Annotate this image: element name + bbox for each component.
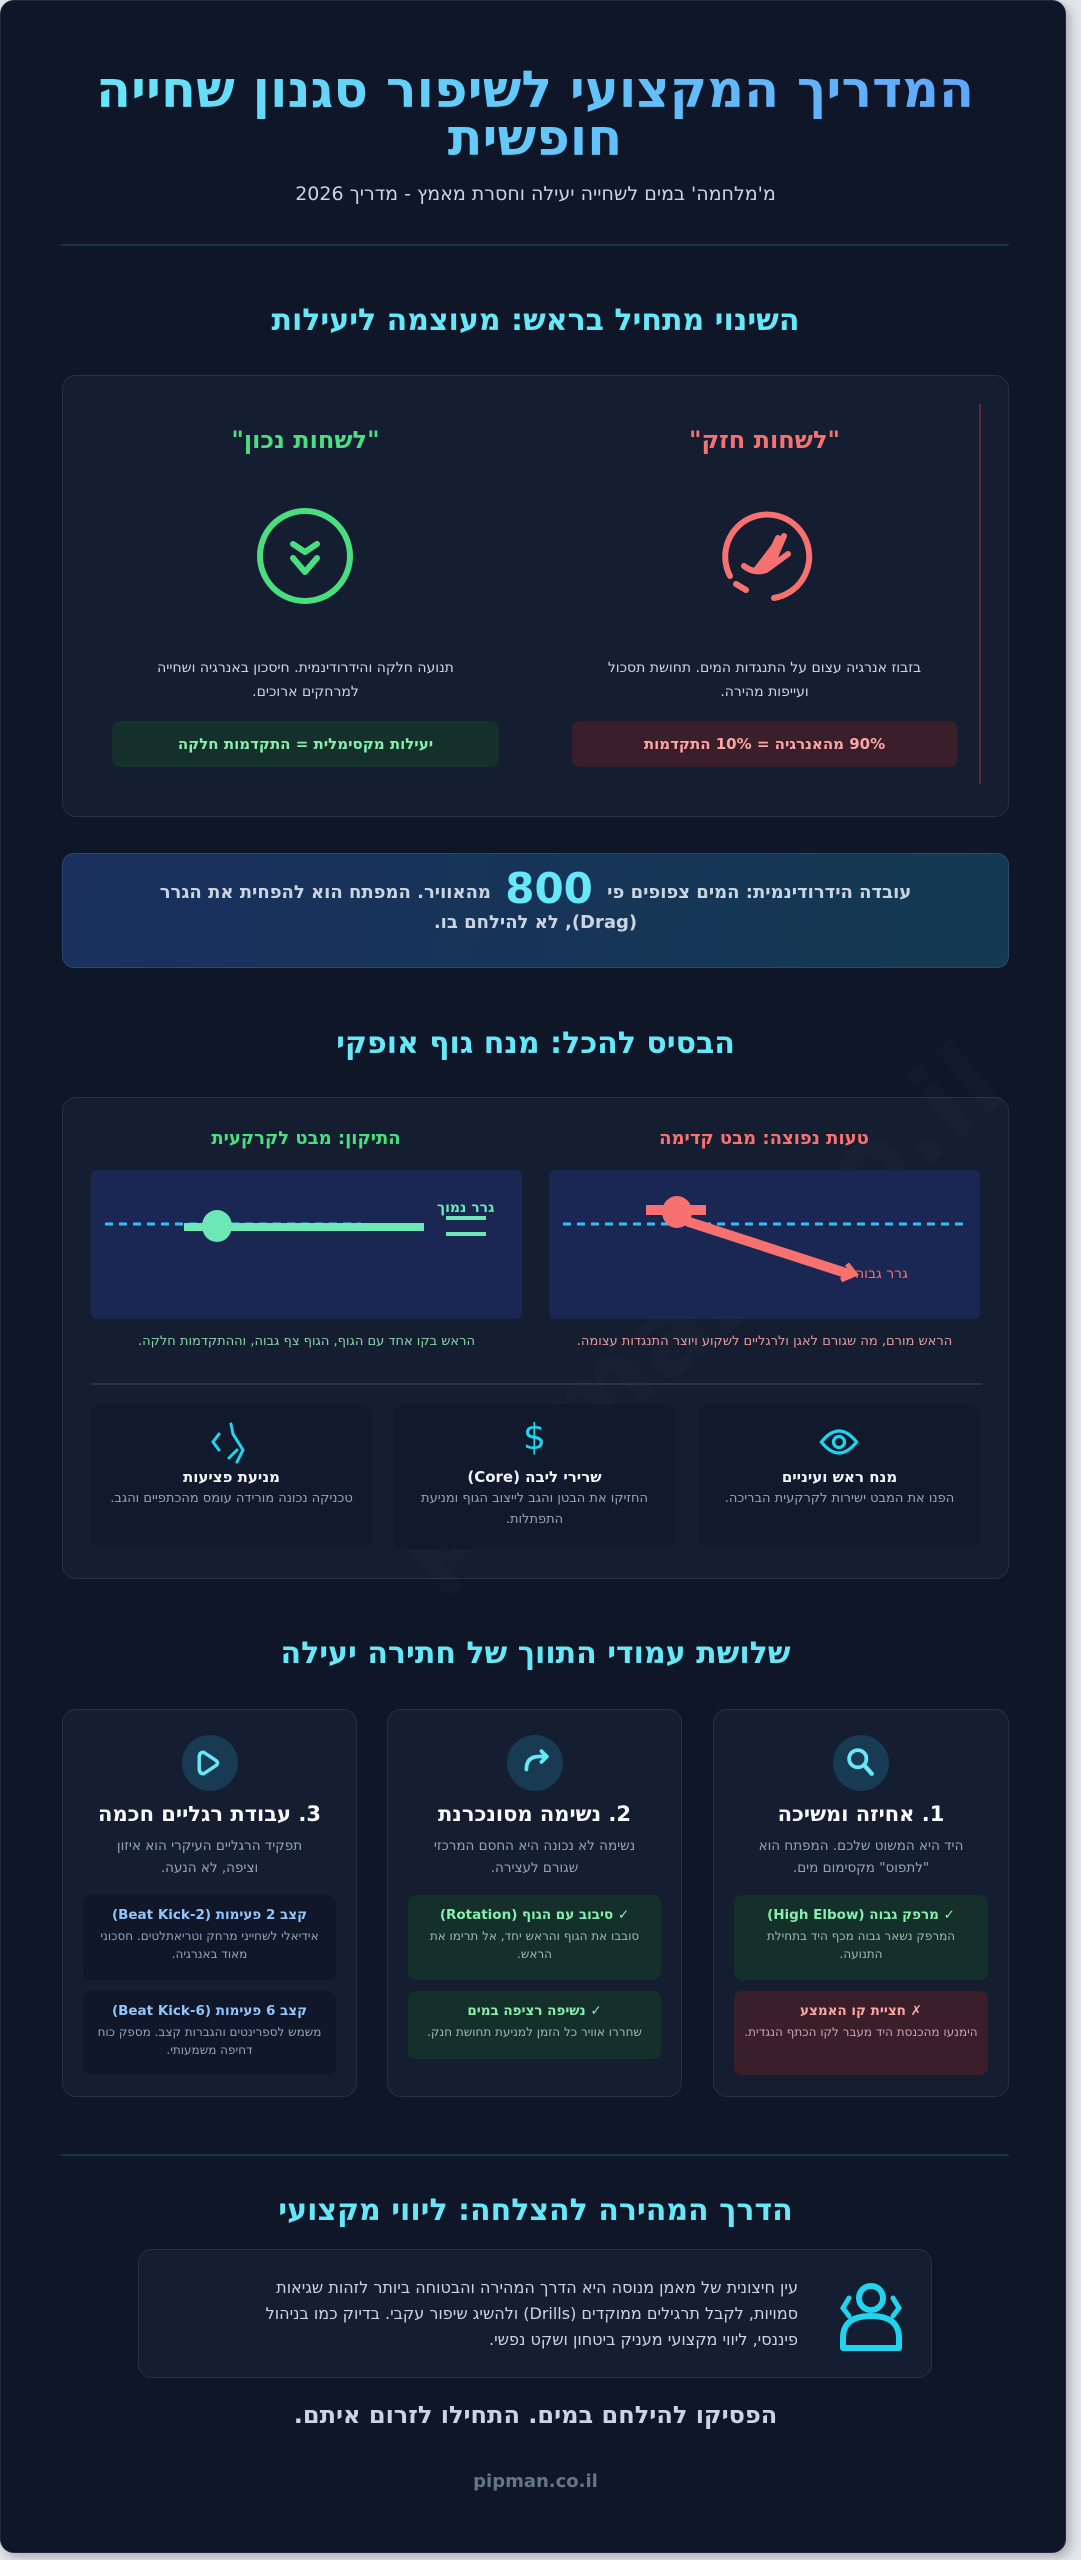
pillar 1: catch and pull: היד היא המשוט שלכם. המפתח הוא "לתפוס" מקסימום מים. bbox=[759, 1838, 963, 1876]
tip: high elbow: ✓ מרפק גבוה (High Elbow) bbox=[767, 1907, 955, 1923]
panel: swim hard vs swim right bbox=[62, 375, 1009, 817]
tip: midline bbox=[734, 1991, 988, 2075]
tip: high elbow: המרפק נשאר גבוה מכף היד בתחילת התנועה. bbox=[767, 1929, 955, 1961]
card: head and eyes bbox=[699, 1404, 980, 1549]
pill: efficiency bbox=[112, 721, 499, 767]
pillar 1: catch and pull bbox=[713, 1709, 1009, 2097]
tip: 2-beat bbox=[83, 1895, 336, 1980]
icon: struggling hand bbox=[722, 512, 812, 601]
text: hard description: בזבוז אנרגיה עצום על התנגדות המים. תחושת תסכול ועייפות מהירה. bbox=[608, 660, 921, 700]
panel: coaching bbox=[138, 2249, 932, 2378]
tip: rotation: סובבו את הגוף והראש יחד, אל תרימו את הראש. bbox=[430, 1929, 639, 1961]
pillar 3: legs: תפקיד הרגליים העיקרי הוא איזון וציפה, לא הנעה. bbox=[117, 1838, 302, 1876]
heading: coaching: הדרך המהירה להצלחה: ליווי מקצועי bbox=[278, 2193, 793, 2228]
icon: zigzag bbox=[211, 1422, 245, 1464]
card: core bbox=[394, 1404, 675, 1549]
tip: 2-beat: קצב 2 פעימות (2-Beat Kick) bbox=[112, 1907, 307, 1923]
text: right description: תנועה חלקה והידרודינמית. חיסכון באנרגיה ושחייה למרחקים ארוכים. bbox=[157, 660, 454, 700]
diagram: correct position bbox=[91, 1170, 522, 1319]
heading: swim right: "לשחות נכון" bbox=[231, 426, 380, 454]
panel: body position bbox=[62, 1097, 1009, 1579]
tip: 6-beat bbox=[83, 1991, 336, 2075]
tip: 2-beat: אידיאלי לשחייני מרחק וטריאתלטים. חסכוני מאוד באנרגיה. bbox=[100, 1929, 319, 1961]
icon: redo bbox=[506, 1735, 562, 1791]
diagram: correct position: גרר נמוך bbox=[437, 1200, 494, 1216]
card: head and eyes: הפנו את המבט ישירות לקרקעית הבריכה. bbox=[725, 1491, 954, 1506]
icon: user bbox=[840, 2283, 902, 2351]
icon: dollar: $ bbox=[523, 1417, 546, 1458]
icon: heart bbox=[182, 1735, 238, 1791]
tip: high elbow bbox=[734, 1895, 988, 1980]
card: injury prevention: מניעת פציעות bbox=[183, 1468, 280, 1486]
heading: swim hard: "לשחות חזק" bbox=[689, 426, 840, 454]
card: core: שרירי ליבה (Core) bbox=[467, 1468, 602, 1486]
heading: efficiency: השינוי מתחיל בראש: מעוצמה ליעילות bbox=[271, 303, 800, 338]
diagram: wrong position bbox=[549, 1170, 980, 1319]
subtitle: מ'מלחמה' במים לשחייה יעילה וחסרת מאמץ - מדריך 2026 bbox=[295, 183, 776, 205]
column: swim right bbox=[112, 426, 499, 767]
heading: three pillars: שלושת עמודי התווך של חתירה יעילה bbox=[280, 1636, 791, 1671]
heading: body position: הבסיס להכל: מנח גוף אופקי bbox=[336, 1026, 735, 1061]
card: core: החזיקו את הבטן והגב לייצוב הגוף ומניעת התפתלות. bbox=[421, 1491, 648, 1527]
pillar 2: breathing bbox=[387, 1709, 682, 2097]
callout: 800 banner: עובדה הידרודינמית: המים צפופים פי 800 מהאוויר. המפתח הוא להפחית את הגרר (Drag), לא להילחם בו. bbox=[160, 864, 911, 933]
diagram: wrong position: גרר גבוה bbox=[855, 1266, 908, 1282]
icon: check circle bbox=[257, 508, 353, 604]
callout: 800 banner bbox=[62, 853, 1009, 968]
tip: exhale: ✓ נשיפה רציפה במים bbox=[467, 2003, 602, 2019]
tip: 6-beat: קצב 6 פעימות (6-Beat Kick) bbox=[112, 2003, 307, 2019]
tip: midline: ✗ חציית קו האמצע bbox=[800, 2003, 922, 2019]
tip: rotation: ✓ סיבוב עם הגוף (Rotation) bbox=[440, 1907, 629, 1923]
watermark: pipman.co.il bbox=[361, 1018, 1027, 1606]
icon: eye bbox=[819, 1429, 859, 1455]
tip: rotation bbox=[408, 1895, 661, 1980]
subheading: mistake: טעות נפוצה: מבט קדימה bbox=[659, 1128, 869, 1149]
caption: mistake: הראש מורם, מה שגורם לאגן ולרגליים לשקוע ויוצר התנגדות עצומה. bbox=[577, 1334, 952, 1349]
closing line: הפסיקו להילחם במים. התחילו לזרום איתם. bbox=[294, 2401, 777, 2429]
pillar 1: catch and pull: 1. אחיזה ומשיכה bbox=[778, 1802, 944, 1826]
subheading: fix: התיקון: מבט לקרקעית bbox=[211, 1128, 401, 1149]
tip: exhale bbox=[408, 1991, 661, 2059]
pill: efficiency: יעילות מקסימלית = התקדמות חלקה bbox=[178, 735, 433, 753]
card: injury prevention: טכניקה נכונה מורידה עומס מהכתפיים והגב. bbox=[110, 1491, 353, 1506]
tip: exhale: שחררו אוויר כל הזמן למניעת תחושת חנק. bbox=[427, 2025, 642, 2039]
pillar 3: legs: 3. עבודת רגליים חכמה bbox=[98, 1802, 321, 1826]
card: injury prevention bbox=[91, 1404, 372, 1549]
caption: fix: הראש בקו אחד עם הגוף, הגוף צף גבוה, וההתקדמות חלקה. bbox=[138, 1334, 475, 1349]
pill: 90%: 90% מהאנרגיה = 10% התקדמות bbox=[644, 735, 885, 753]
pill: 90% bbox=[572, 721, 957, 767]
icon: search bbox=[833, 1735, 889, 1791]
card: head and eyes: מנח ראש ועיניים bbox=[782, 1468, 897, 1486]
text: coaching description: עין חיצונית של מאמן מנוסה היא הדרך המהירה והבטוחה ביותר לזהות שגיאות סמויות, לקבל תרגילים ממוקדים (Drills) ולהשיג שיפור עקבי. בדיוק כמו בניהול פיננסי, ליווי מקצועי מעניק ביטחון ושקט נפשי. bbox=[266, 2278, 798, 2349]
pillar 2: breathing: 2. נשימה מסונכרנת bbox=[438, 1802, 631, 1826]
title: המדריך המקצועי לשיפור סגנון שחייה חופשית bbox=[96, 61, 974, 168]
footer: site: pipman.co.il bbox=[473, 2471, 598, 2492]
pillar 3: legs bbox=[62, 1709, 357, 2097]
tip: midline: הימנעו מהכנסת היד מעבר לקו הכתף הנגדית. bbox=[744, 2025, 978, 2039]
tip: 6-beat: משמש לספרינטים והגברות קצב. מספק כוח דחיפה משמעותי. bbox=[98, 2025, 321, 2057]
column: swim hard bbox=[572, 426, 957, 767]
pillar 2: breathing: נשימה לא נכונה היא החסם המרכזי שגורם לעצירה. bbox=[434, 1838, 635, 1876]
